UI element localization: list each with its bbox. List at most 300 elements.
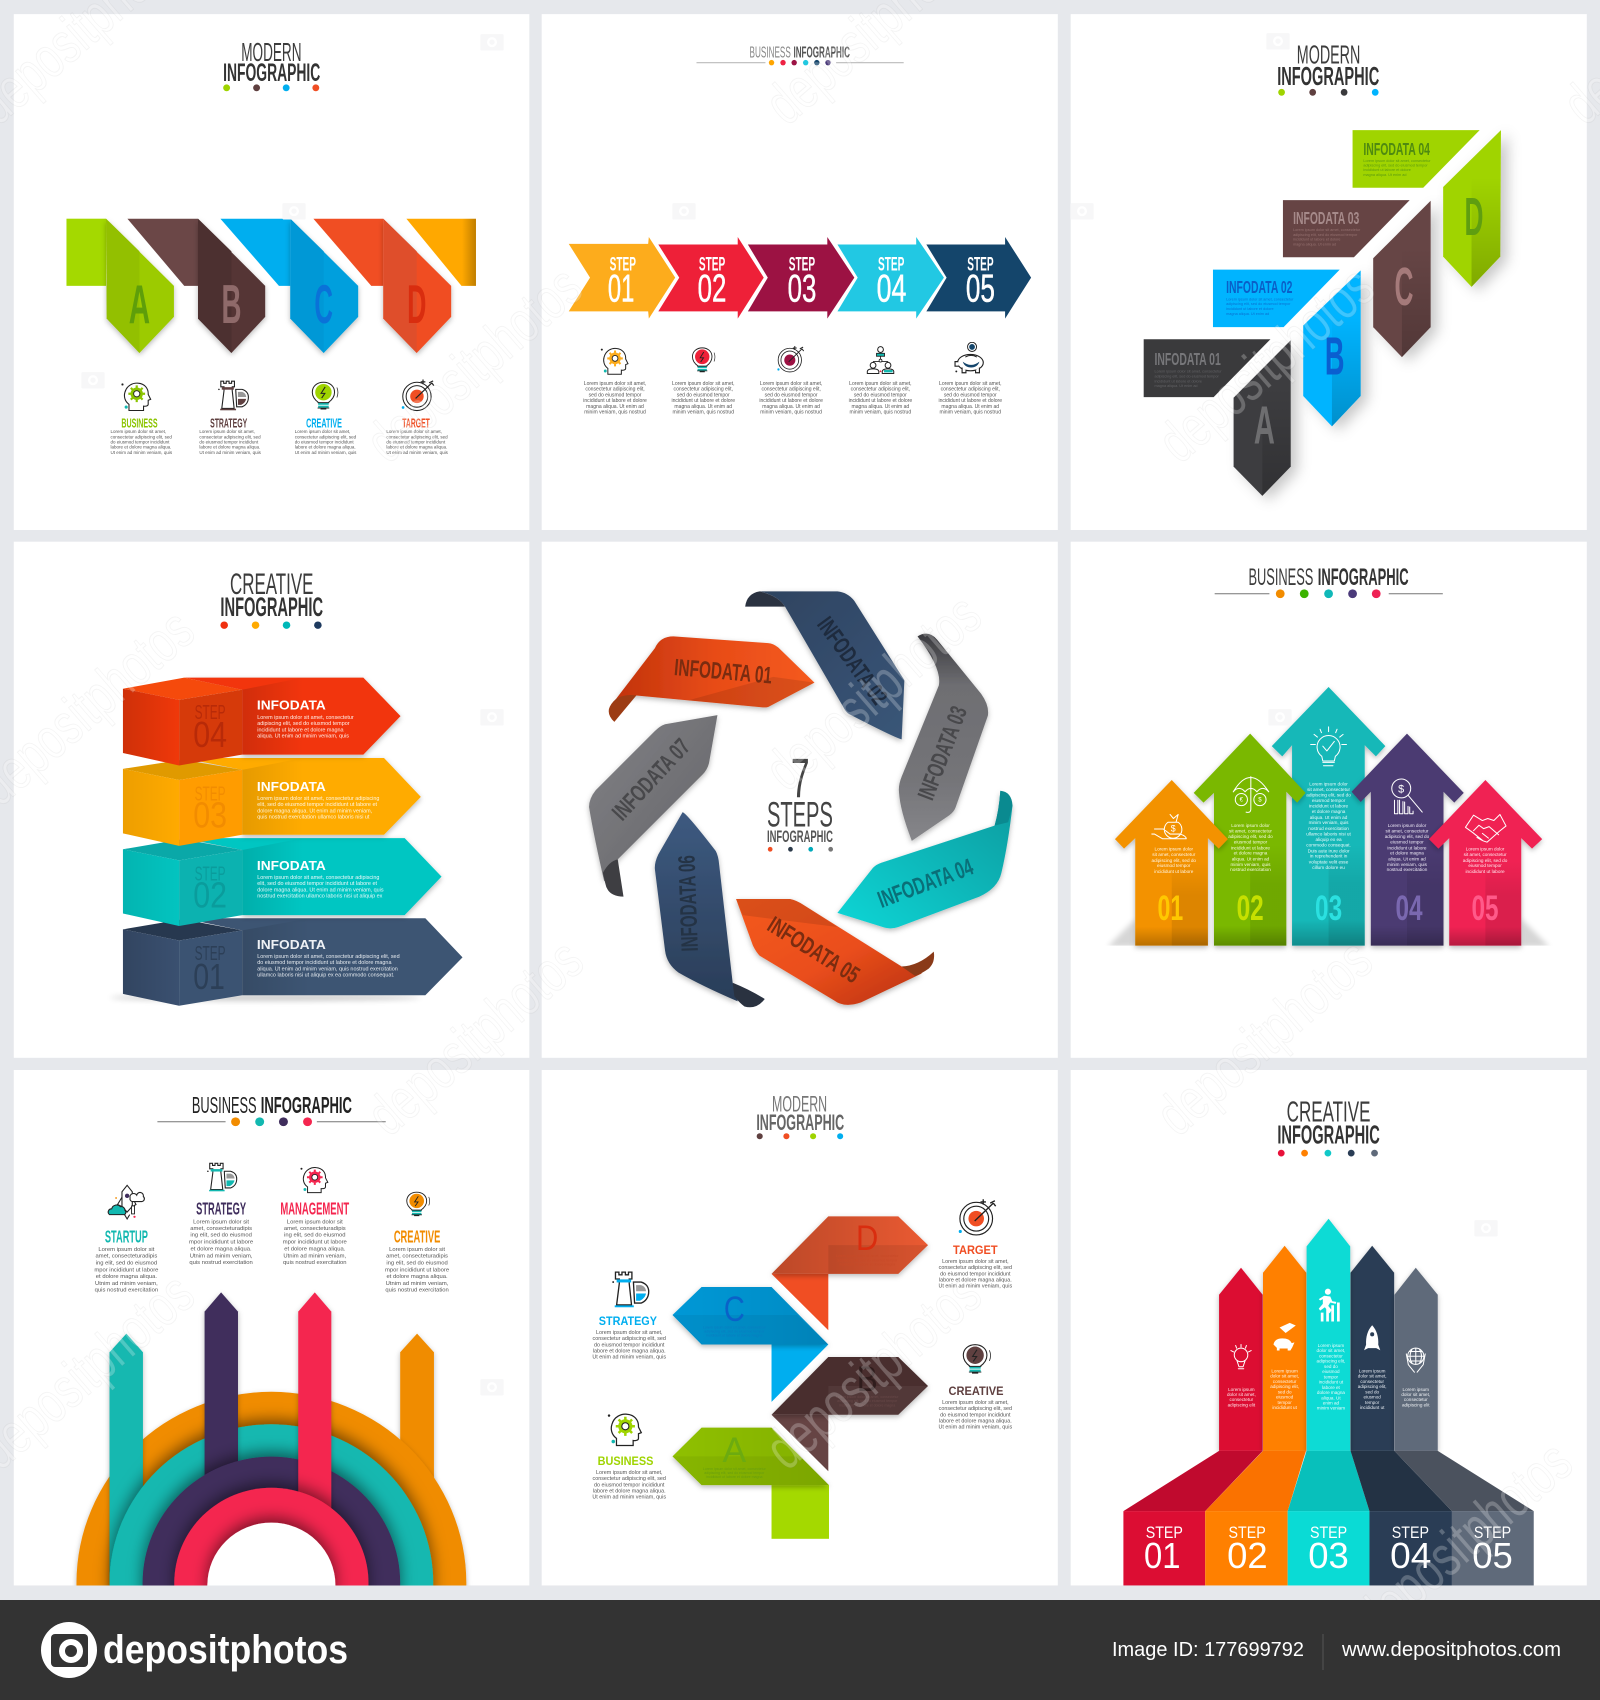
ribbon: infodata 05 — [736, 899, 934, 1005]
step 04 block: adipiscing elit, sed do eiusmod tempor — [257, 721, 350, 727]
floor block: step 04: 04 — [1390, 1536, 1431, 1576]
floor block: step 03: 03 — [1308, 1536, 1349, 1576]
arrow C: adipiscing elit, sed do eiusmod tempor — [704, 1330, 765, 1334]
step 02 block: nostrud exercitation ullamco laboris nisi ut aliquip ex — [257, 894, 383, 900]
arrow 03: Duis aute irure dolor — [1308, 848, 1350, 853]
step 05 description: magna aliqua. Ut enim ad — [941, 404, 999, 410]
arrow 01: incididunt ut labore — [1154, 869, 1194, 874]
arrow 03: eiusmod tempor — [1312, 798, 1346, 803]
step 01 description — [583, 348, 647, 415]
item: startup — [94, 1185, 158, 1294]
item: startup: Lorem ipsum dolor sit — [98, 1247, 155, 1253]
item: management: Utnim ad minim veniam, — [283, 1253, 347, 1259]
item: strategy: consectetur adipiscing elit, sed — [593, 1336, 666, 1342]
step 04 arrow — [837, 237, 944, 319]
arrow 03: 03 — [1315, 889, 1342, 928]
arrow 03: minim veniam, quis — [1309, 820, 1349, 825]
arrow 05 — [1429, 780, 1542, 946]
item: target: Lorem ipsum dolor sit amet, — [942, 1259, 1009, 1265]
footer bar — [0, 1600, 1600, 1700]
step 03 description: incididunt ut labore et dolore — [759, 398, 823, 404]
item: strategy: STRATEGY — [196, 1199, 246, 1219]
item: creative: Lorem ipsum dolor sit amet, — [295, 429, 350, 434]
floor block: step 01: STEP — [1146, 1523, 1183, 1542]
item: strategy: consectetur adipiscing elit, sed — [199, 434, 261, 439]
title: CREATIVE — [230, 568, 313, 601]
arrow 02: adipiscing elit, sed do — [1228, 834, 1273, 839]
item: strategy: STRATEGY — [210, 416, 247, 431]
step 02 description: incididunt ut labore et dolore — [671, 398, 735, 404]
footer logo: depositphotos — [103, 1628, 348, 1672]
step 04 arrow: 04 — [877, 267, 906, 310]
step 02 block: STEP — [195, 863, 226, 886]
tab: infodata 04 — [1353, 130, 1480, 188]
item: strategy — [199, 381, 262, 455]
step 05 description — [938, 342, 1002, 415]
tab: infodata 01: incididunt ut labore et dolore — [1155, 379, 1202, 383]
item: management: amet, consecteturadipis — [284, 1226, 346, 1232]
arrow 02: sed do — [1278, 1389, 1292, 1394]
arrow 04: eiusmod — [1364, 1395, 1381, 1400]
step 03 arrow: STEP — [789, 253, 815, 274]
arrow 02: € — [1240, 797, 1244, 804]
step 01 block — [110, 918, 463, 1006]
item: target: do eiusmod tempor incididunt — [940, 1272, 1011, 1278]
item: creative — [938, 1345, 1012, 1431]
item: creative: CREATIVE — [306, 416, 342, 431]
pillar C — [1373, 201, 1431, 357]
arrow 05: 05 — [1472, 889, 1499, 928]
arrow 04: incididunt ut labore — [1387, 845, 1427, 850]
step 01 arrow: 01 — [608, 267, 634, 310]
step 02 description: sed do eiusmod tempor — [677, 392, 730, 398]
title: CREATIVE — [1287, 1096, 1370, 1128]
step 01 arrow — [569, 237, 675, 319]
arrow 04: consectetur — [1360, 1379, 1384, 1384]
panel: fold arrows A B C D — [542, 1070, 1058, 1585]
arrow 04: aliqua. Ut enim ad — [1388, 856, 1426, 861]
footer image id and url: www.depositphotos.com — [1341, 1639, 1561, 1661]
step 03 description: consectetur adipiscing elit, — [761, 387, 821, 393]
panel: five step chevrons — [542, 14, 1058, 530]
arrow C: Lorem ipsum dolor sit amet, consectetur — [703, 1326, 767, 1330]
step 01 description: minim veniam, quis nostrud — [584, 409, 646, 415]
item: target: Lorem ipsum dolor sit amet, — [386, 429, 442, 434]
arrow 01: adipiscing elit, sed do — [1152, 858, 1196, 863]
floor block: step 05 — [1394, 1451, 1534, 1585]
title: INFOGRAPHIC — [220, 591, 323, 622]
tab: infodata 04: magna aliqua. Ut enim ad — [1363, 173, 1406, 177]
arrow 03: sit amet, consectetur — [1307, 787, 1350, 792]
step 03 block: Lorem ipsum dolor sit amet, consectetur adipiscing — [257, 796, 379, 802]
floor block: step 01 — [1123, 1451, 1263, 1585]
title: BUSINESS — [1248, 565, 1313, 591]
arrow 03: sed do — [1324, 1364, 1338, 1369]
item: creative: quis nostrud exercitation — [385, 1288, 449, 1294]
step 01 block: aliqua. Ut enim ad minim veniam, quis nostrud exercitation — [257, 966, 398, 972]
title — [157, 1092, 386, 1126]
step 03 block: 03 — [193, 795, 227, 835]
item: management: et dolore magna aliqua. — [284, 1247, 346, 1252]
title — [696, 44, 904, 65]
ribbon: infodata 01: INFODATA 01 — [673, 655, 773, 689]
item: creative: labore et dolore magna aliqua. — [295, 445, 356, 450]
item: creative: CREATIVE — [948, 1384, 1004, 1398]
arrow 01: adipiscing elit — [1228, 1403, 1256, 1408]
tab: infodata 04: INFODATA 04 — [1363, 140, 1430, 159]
arrow C: C — [314, 274, 333, 335]
arrow A: Lorem ipsum dolor sit amet, consectetur — [703, 1467, 767, 1471]
arrow 01 — [1219, 1268, 1263, 1451]
step 02 description — [671, 348, 735, 415]
centre title: 7 — [791, 746, 810, 809]
arrow 04: nostrud exercitation — [1387, 867, 1428, 872]
arrow 02 — [1194, 734, 1306, 946]
arrow C: C — [724, 1290, 745, 1329]
item: target: consectetur adipiscing elit, sed — [386, 434, 448, 439]
tab: infodata 02: adipiscing elit, sed do eiusmod tempor — [1226, 302, 1291, 306]
step 03 block: elit, sed do eiusmod tempor incididunt ut labore et — [257, 802, 378, 808]
title: BUSINESS — [750, 44, 791, 62]
arrow C — [672, 1287, 828, 1402]
item: creative: Ut enim ad minim veniam, quis — [295, 450, 357, 455]
item: strategy: STRATEGY — [599, 1314, 657, 1328]
step 05 arrow: 05 — [966, 267, 995, 310]
pillar D — [1443, 130, 1501, 287]
title: INFOGRAPHIC — [223, 60, 320, 87]
arrow 04: tempor — [1365, 1400, 1380, 1405]
step 03 arrow — [748, 237, 854, 319]
item: business: BUSINESS — [598, 1454, 653, 1468]
centre title — [767, 746, 833, 852]
tab: infodata 03: adipiscing elit, sed do eiusmod tempor — [1293, 233, 1358, 237]
tab: infodata 03: incididunt ut labore et dolore — [1293, 238, 1341, 242]
item: management: Lorem ipsum dolor sit — [287, 1219, 343, 1225]
item: target — [386, 380, 449, 455]
item: strategy: Ut enim ad minim veniam, quis — [592, 1355, 666, 1361]
arrow 03: minim veniam — [1317, 1406, 1345, 1411]
item: target: labore et dolore magna aliqua. — [386, 445, 447, 450]
floor block: step 02: STEP — [1229, 1523, 1266, 1542]
item: strategy: Lorem ipsum dolor sit amet, — [596, 1330, 663, 1336]
item: business: labore et dolore magna aliqua. — [111, 445, 171, 450]
item: creative: amet, consecteturadipis — [386, 1254, 448, 1260]
arrow 04: sed do — [1365, 1389, 1379, 1394]
floor block: step 04 — [1351, 1451, 1452, 1585]
step 04 block: Lorem ipsum dolor sit amet, consectetur — [257, 715, 354, 721]
arrow 02: Lorem ipsum dolor — [1231, 823, 1270, 828]
arrow 02: $ — [1258, 797, 1262, 804]
tab: infodata 01: adipiscing elit, sed do eiusmod tempor — [1155, 374, 1219, 378]
tab: infodata 04: adipiscing elit, sed do eiusmod tempor — [1363, 164, 1428, 168]
item: creative: Lorem ipsum dolor sit — [389, 1247, 445, 1253]
item: strategy: labore et dolore magna aliqua. — [199, 445, 260, 450]
arrow A: A — [129, 274, 150, 335]
arrow B: incididunt ut labore et dolore magna — [839, 1404, 895, 1408]
arrow 03: Lorem ipsum dolor — [1309, 781, 1348, 786]
item: target — [938, 1199, 1012, 1290]
arrow 03: aliqua. Ut — [1321, 1396, 1341, 1401]
arrow 03: adipiscing elit, sed do — [1306, 793, 1351, 798]
panel: seven step ribbon cycle — [542, 542, 1058, 1058]
step 02 arrow: STEP — [699, 253, 725, 274]
ribbon: infodata 07 — [589, 715, 717, 897]
ribbon: infodata 04 — [837, 791, 1013, 928]
arrow B: Lorem ipsum dolor sit amet, consectetur — [836, 1395, 899, 1399]
tab: infodata 03: magna aliqua. Ut enim ad — [1293, 243, 1336, 247]
item: business: consectetur adipiscing elit, sed — [111, 434, 172, 439]
arrow 05: consectetur — [1404, 1397, 1428, 1402]
ribbon: infodata 04: INFODATA 04 — [874, 854, 977, 914]
arrow A — [106, 219, 174, 353]
footer image id and url — [1112, 1634, 1561, 1670]
arrow 05: sit amet, consectetur — [1464, 852, 1507, 857]
ribbon: infodata 02 — [745, 591, 904, 739]
panel: rainbow arcs with arrows — [14, 1070, 530, 1586]
item: strategy: quis nostrud exercitation — [189, 1260, 253, 1266]
title — [1215, 565, 1443, 598]
arrow 01 — [1115, 780, 1228, 946]
arrow 05: Lorem ipsum — [1403, 1387, 1429, 1392]
item: business: consectetur adipiscing elit, sed — [593, 1476, 666, 1482]
arrow D: incididunt ut labore et dolore magna — [839, 1263, 895, 1267]
arrow 01: eiusmod tempor — [1157, 863, 1191, 868]
step 01 block: ullamco laboris nisi ut aliquip ex ea commodo consequat. — [257, 973, 394, 979]
arrow 04: sit amet, consectetur — [1386, 828, 1429, 833]
step 01 block: Lorem ipsum dolor sit amet, consectetur adipiscing elit, sed — [257, 954, 400, 960]
pillar B — [1303, 270, 1361, 426]
item: management: ing elit, sed do eiusmod — [284, 1233, 346, 1239]
step 05 description: consectetur adipiscing elit, — [941, 387, 1000, 393]
arrow 03: aliqua. Ut enim ad — [1310, 815, 1348, 820]
item: strategy: labore et dolore magna aliqua. — [593, 1349, 666, 1355]
step 04 description: minim veniam, quis nostrud — [850, 409, 911, 415]
arrow D: D — [407, 274, 426, 335]
step 04 block: incididunt ut labore et dolore magna — [257, 727, 344, 733]
arrow 03: commodo consequat. — [1306, 843, 1351, 848]
item: business — [111, 383, 173, 455]
title: INFOGRAPHIC — [1277, 63, 1379, 91]
step 04 block: INFODATA — [257, 698, 326, 713]
tab: infodata 03: INFODATA 03 — [1293, 209, 1359, 228]
item: target: TARGET — [953, 1243, 998, 1257]
ribbon: infodata 06 — [655, 812, 765, 1007]
arrow 02: incididunt ut labore — [1231, 845, 1270, 850]
panel: ribbon A B C D — [14, 14, 529, 530]
item: strategy: ing elit, sed do eiusmod — [190, 1233, 252, 1239]
floor block: step 01: 01 — [1144, 1536, 1181, 1576]
arrow 03: labore et — [1322, 1385, 1341, 1390]
title — [1277, 1096, 1380, 1157]
arrow 02: Lorem ipsum — [1271, 1369, 1298, 1374]
item: strategy: mpor incididunt ut labore — [189, 1240, 253, 1246]
stock photo watermarks: depositphotos — [1144, 927, 1384, 1148]
item: strategy: Lorem ipsum dolor sit — [193, 1219, 249, 1225]
item: creative: do eiusmod tempor incididunt — [295, 440, 354, 445]
step 05 description: Lorem ipsum dolor sit amet, — [939, 381, 1002, 387]
arrow 03: cillum dolore eu — [1312, 865, 1345, 870]
arrow 04: $ — [1398, 783, 1404, 795]
arrow 01: 01 — [1158, 889, 1183, 928]
pillar D: D — [1464, 187, 1483, 247]
item: strategy: Ut enim ad minim veniam, quis — [199, 450, 262, 455]
arrow 01: Lorem ipsum — [1228, 1387, 1255, 1392]
arrow 04: Lorem ipsum dolor — [1388, 823, 1427, 828]
item: strategy — [592, 1272, 666, 1361]
tab: infodata 02: magna aliqua. Ut enim ad — [1226, 312, 1269, 316]
arrow A: incididunt ut labore et dolore magna — [706, 1475, 762, 1479]
arrow 03: consectetur — [1319, 1354, 1343, 1359]
arrow 03: dolor sit amet, — [1317, 1348, 1345, 1353]
step 01 description: consectetur adipiscing elit, — [585, 387, 645, 393]
item: target: do eiusmod tempor incididunt — [386, 440, 446, 445]
arrow 04: incididunt ut — [1360, 1405, 1385, 1410]
arrow 02: eiusmod tempor — [1234, 840, 1268, 845]
step 01 description: magna aliqua. Ut enim ad — [586, 404, 644, 410]
item: creative — [295, 382, 357, 455]
title: INFOGRAPHIC — [261, 1092, 352, 1118]
item: strategy: Utnim ad minim veniam, — [190, 1253, 253, 1259]
item: business: BUSINESS — [121, 416, 158, 431]
ribbon: infodata 06: INFODATA 06 — [674, 855, 704, 952]
panel: five house arrows — [1071, 542, 1587, 1058]
arrow 04: et dolore magna — [1390, 851, 1424, 856]
step 01 arrow: STEP — [610, 253, 636, 274]
tab: infodata 02: INFODATA 02 — [1226, 278, 1292, 297]
title — [223, 39, 320, 91]
arrow 02: aliqua. Ut enim ad — [1232, 856, 1270, 861]
stock photo watermarks: depositphotos — [354, 254, 594, 475]
tab: infodata 04: Lorem ipsum dolor sit amet, consectetur — [1363, 159, 1431, 163]
arrow 04 — [1352, 734, 1464, 946]
arrow 03 — [1307, 1219, 1350, 1451]
panel: diagonal infodata A-D — [1071, 14, 1587, 530]
step 01 block: do eiusmod tempor incididunt ut labore et dolore magna — [257, 960, 391, 966]
arrow 05: Lorem ipsum dolor — [1466, 847, 1505, 852]
tab: infodata 03: Lorem ipsum dolor sit amet, consectetur — [1293, 228, 1361, 232]
arrow 05: eiusmod tempor — [1468, 863, 1502, 868]
arrow 05: dolor sit amet, — [1401, 1392, 1430, 1397]
step 04 block: aliqua. Ut enim ad minim veniam, quis — [257, 734, 349, 740]
item: business: do eiusmod tempor incididunt — [111, 440, 170, 445]
ribbon: infodata 05: INFODATA 05 — [763, 912, 864, 989]
arrow 02 — [1263, 1246, 1306, 1451]
item: target: Ut enim ad minim veniam, quis — [938, 1284, 1012, 1290]
title — [1277, 42, 1379, 96]
step 04 arrow: STEP — [878, 253, 904, 274]
arrow 03: eiusmod — [1322, 1369, 1340, 1374]
floor block: step 02: 02 — [1227, 1536, 1268, 1576]
arc and arrow chart — [46, 1282, 470, 1586]
step 02 description: consectetur adipiscing elit, — [674, 387, 733, 393]
step 01 description: incididunt ut labore et dolore — [583, 398, 647, 404]
arrow 03: ullamco laboris nisi ut — [1306, 831, 1352, 836]
title: INFOGRAPHIC — [756, 1110, 844, 1135]
arrow 03: dolore magna — [1317, 1390, 1345, 1395]
arrow B: B — [857, 1360, 878, 1399]
arrow 03: incididunt ut labore — [1309, 804, 1349, 809]
arrow 04: minim veniam, quis — [1387, 862, 1428, 867]
arrow 02: consectetur — [1273, 1379, 1297, 1384]
step 03 arrow: 03 — [788, 267, 816, 310]
arrow D: Lorem ipsum dolor sit amet, consectetur — [836, 1254, 899, 1258]
item: strategy — [189, 1163, 253, 1266]
step 02 description: magna aliqua. Ut enim ad — [674, 404, 732, 410]
item: business: do eiusmod tempor incididunt — [594, 1482, 665, 1488]
step 01 block: 01 — [193, 956, 225, 997]
item: target: labore et dolore magna aliqua. — [939, 1278, 1012, 1284]
arrow 03: aliquip ex ea — [1315, 837, 1342, 842]
stock photo watermarks: depositphotos — [753, 1261, 993, 1482]
item: management — [280, 1168, 349, 1266]
step 04 description: sed do eiusmod tempor — [854, 392, 907, 398]
arrow 02: minim veniam, quis — [1231, 862, 1271, 867]
item: strategy: do eiusmod tempor incididunt — [594, 1342, 665, 1348]
tab: infodata 02: Lorem ipsum dolor sit amet, consectetur — [1226, 297, 1294, 301]
floor block: step 03 — [1288, 1451, 1369, 1585]
step 02 block — [123, 838, 442, 926]
item: creative: Ut enim ad minim veniam, quis — [938, 1425, 1012, 1431]
arrow B — [198, 219, 265, 353]
stock photo watermarks: depositphotos — [1146, 254, 1386, 475]
arrow 03: voluptate velit esse — [1309, 859, 1349, 864]
step 03 description: sed do eiusmod tempor — [765, 392, 818, 398]
arrow 04 — [1351, 1246, 1394, 1451]
step 05 description: incididunt ut labore et dolore — [938, 398, 1002, 404]
step 05 description: minim veniam, quis nostrud — [939, 409, 1001, 415]
item: management: MANAGEMENT — [280, 1199, 349, 1219]
title: INFOGRAPHIC — [793, 44, 850, 62]
step 02 description: Lorem ipsum dolor sit amet, — [672, 381, 734, 387]
item: creative — [385, 1192, 449, 1294]
tab: infodata 01 — [1144, 339, 1270, 397]
item: creative: do eiusmod tempor incididunt — [940, 1412, 1011, 1418]
step 03 block: INFODATA — [257, 779, 326, 794]
step 05 description: sed do eiusmod tempor — [944, 392, 997, 398]
step 02 arrow: 02 — [698, 267, 726, 310]
item: business: Ut enim ad minim veniam, quis — [111, 450, 173, 455]
step 01 description: sed do eiusmod tempor — [589, 392, 642, 398]
title: MODERN — [1297, 42, 1360, 70]
arrow 04: adipiscing elit, — [1358, 1384, 1387, 1389]
centre title: INFOGRAPHIC — [767, 828, 833, 846]
item: creative: consectetur adipiscing elit, sed — [939, 1406, 1012, 1412]
floor block: step 04: STEP — [1392, 1523, 1429, 1542]
pillar A: A — [1254, 396, 1275, 456]
arrow 01: sit amet, consectetur — [1152, 852, 1196, 857]
item: creative: Lorem ipsum dolor sit amet, — [942, 1400, 1009, 1406]
step 03 description: Lorem ipsum dolor sit amet, — [760, 381, 822, 387]
step 03 description — [759, 346, 823, 415]
item: creative: Utnim ad minim veniam, — [386, 1281, 449, 1287]
title: BUSINESS — [192, 1092, 257, 1118]
item: strategy: do eiusmod tempor incididunt — [199, 440, 259, 445]
step 02 block: dolore magna aliqua. Ut enim ad minim veniam, quis — [257, 888, 384, 894]
arrow 02: et dolore magna — [1234, 851, 1268, 856]
floor block: step 05: STEP — [1474, 1523, 1511, 1542]
step 02 block: Lorem ipsum dolor sit amet, consectetur adipiscing — [257, 875, 379, 881]
title: MODERN — [772, 1092, 827, 1117]
item: target: Ut enim ad minim veniam, quis — [386, 450, 449, 455]
ground shadow — [1107, 919, 1550, 947]
step 04 block: STEP — [195, 701, 226, 724]
stock photo watermarks: depositphotos — [355, 927, 595, 1148]
step 03 block: STEP — [195, 782, 226, 805]
step 02 description: minim veniam, quis nostrud — [672, 409, 734, 415]
item: startup: quis nostrud exercitation — [95, 1288, 158, 1294]
step 01 block: INFODATA — [257, 937, 326, 952]
step 05 arrow: STEP — [967, 253, 994, 274]
